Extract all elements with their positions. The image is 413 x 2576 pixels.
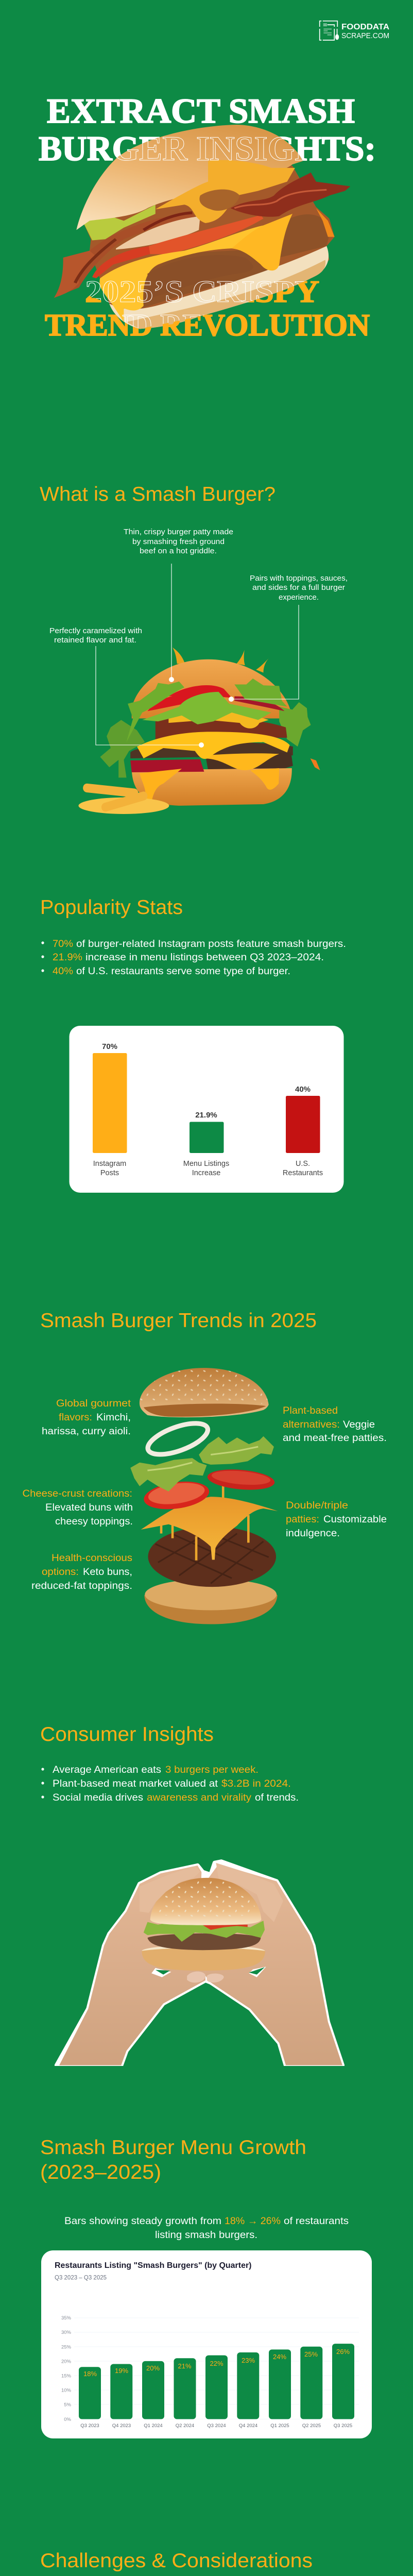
list: consumer insights: awareness and virality — [147, 1792, 252, 1803]
title: orange lines: 2025’S CRISPY — [85, 275, 319, 309]
chart gridlines and y axis: 35% — [61, 2315, 72, 2321]
callout: toppings: Pairs with toppings, sauces, — [250, 574, 348, 583]
chart gridlines and y axis: 15% — [61, 2373, 72, 2379]
heading: consumer insights: Consumer Insights — [40, 1723, 214, 1745]
list: popularity stats: 70% — [53, 939, 73, 950]
title: orange lines: TREND REVOLUTION — [45, 308, 370, 342]
trend: cheese-crust creations: Elevated buns with — [45, 1502, 133, 1513]
chart quarter labels: Q2 2024 — [176, 2423, 194, 2429]
chart quarter labels: Q3 2025 — [334, 2423, 352, 2429]
chart value labels: 19% — [115, 2367, 128, 2375]
text: growth description — [64, 2216, 349, 2241]
trend: cheese-crust creations: Cheese-crust creations: — [23, 1488, 132, 1499]
trend: plant-based alternatives: and meat-free patties. — [283, 1433, 387, 1444]
callout: caramelized — [49, 626, 204, 748]
chart value labels: 21% — [178, 2362, 192, 2370]
list: popularity stats: of burger-related Instagram posts feature smash burgers. — [76, 939, 346, 950]
chart quarter labels — [80, 2423, 352, 2429]
callout: toppings: experience. — [279, 593, 319, 602]
logo: header — [320, 21, 389, 40]
exploded burger illustration — [130, 1368, 278, 1624]
bar: us restaurants: Restaurants — [283, 1169, 323, 1177]
list: consumer insights: $3.2B in 2024. — [221, 1778, 291, 1789]
trend: health-conscious options: Health-conscious — [51, 1553, 132, 1564]
list: popularity stats: increase in menu listings between Q3 2023–2024. — [85, 952, 324, 963]
chart gridlines and y axis — [61, 2315, 359, 2422]
chart gridlines and y axis: 25% — [61, 2344, 72, 2350]
trend: double triple patties: indulgence. — [286, 1528, 340, 1539]
bar: instagram posts: 70% — [102, 1042, 117, 1051]
list: consumer insights: of trends. — [255, 1792, 299, 1803]
chart gridlines and y axis: 20% — [61, 2359, 72, 2365]
callout: patty — [124, 528, 233, 682]
trend: health-conscious options — [31, 1553, 132, 1591]
title: orange lines — [44, 281, 370, 336]
chart quarter labels: Q4 2023 — [112, 2423, 131, 2429]
title: first two lines: BURGER INSIGHTS: — [39, 129, 376, 168]
text: growth description: of restaurants — [284, 2216, 349, 2227]
callout: patty: beef on a hot griddle. — [140, 547, 217, 555]
chart value labels: 18% — [83, 2370, 97, 2378]
bar: menu listings increase — [183, 1111, 229, 1177]
chart gridlines and y axis: 0% — [64, 2417, 72, 2422]
bar: menu listings increase: Menu Listings — [183, 1160, 229, 1168]
list: popularity stats: 40% — [53, 966, 73, 977]
list: consumer insights — [41, 1765, 299, 1803]
chart quarter labels: Q1 2024 — [144, 2423, 163, 2429]
chart subtitle: Q3 2023 – Q3 2025 — [55, 2274, 107, 2281]
trend: global gourmet flavors: Global gourmet — [56, 1398, 131, 1409]
heading: what is a smash burger: What is a Smash Burger? — [40, 483, 276, 505]
text: growth description: listing smash burgers. — [155, 2230, 257, 2241]
list: popularity stats — [41, 939, 346, 977]
chart quarter labels: Q3 2024 — [207, 2423, 226, 2429]
trend: plant-based alternatives: Veggie — [343, 1419, 375, 1430]
chart gridlines and y axis: 30% — [61, 2330, 72, 2335]
title: first two lines: EXTRACT SMASH — [47, 91, 355, 130]
trend: plant-based alternatives: Plant-based — [283, 1405, 338, 1416]
chart value labels: 25% — [304, 2350, 318, 2358]
bar: menu listings increase: 21.9% — [195, 1111, 217, 1120]
trend: plant-based alternatives: alternatives: — [283, 1419, 340, 1430]
bar: us restaurants: U.S. — [296, 1160, 310, 1168]
chart quarter labels: Q2 2025 — [302, 2423, 321, 2429]
callout: patty: by smashing fresh ground — [132, 537, 225, 546]
chart title: Restaurants Listing "Smash Burgers" (by Quarter) — [55, 2261, 251, 2270]
chart gridlines and y axis: 10% — [61, 2387, 72, 2394]
callout: caramelized: retained flavor and fat. — [54, 636, 136, 645]
bar: instagram posts: Posts — [100, 1169, 119, 1177]
trend: double triple patties: patties: — [286, 1514, 319, 1525]
text: growth description: Bars showing steady growth from — [64, 2216, 221, 2227]
callout: toppings: and sides for a full burger — [252, 583, 345, 592]
callout: toppings — [229, 574, 348, 702]
list: popularity stats: 21.9% — [53, 952, 82, 963]
callout: patty: Thin, crispy burger patty made — [124, 528, 233, 536]
image: hands holding a burger — [57, 1861, 342, 2065]
list: consumer insights: Plant-based meat market valued at — [53, 1778, 218, 1789]
logo: header: FOODDATA — [341, 23, 389, 31]
title: outlined part over bun: TREND REVOLUTION — [45, 308, 370, 342]
title: outlined part over bun: 2025’S CRISPY — [85, 275, 319, 309]
hero burger illustration — [54, 125, 350, 329]
heading: menu growth — [40, 2137, 306, 2183]
heading: challenges: Challenges & Considerations — [40, 2550, 313, 2572]
chart value labels — [83, 2348, 350, 2378]
chart gridlines and y axis: 5% — [64, 2402, 72, 2408]
trend: health-conscious options: reduced-fat toppings. — [31, 1581, 132, 1591]
burger illustration: anatomy — [78, 648, 320, 814]
chart quarter labels: Q3 2023 — [80, 2423, 99, 2429]
trend: global gourmet flavors: Kimchi, — [96, 1412, 131, 1423]
bar: menu listings increase: Increase — [192, 1169, 220, 1177]
title: first two lines — [39, 99, 373, 161]
heading: popularity stats: Popularity Stats — [40, 896, 183, 919]
chart quarter labels: Q4 2024 — [239, 2423, 257, 2429]
title — [39, 91, 376, 342]
list: popularity stats: of U.S. restaurants serve some type of burger. — [76, 966, 290, 977]
chart value labels: 26% — [336, 2348, 350, 2355]
title: outlined part over bun: BURGER INSIGHTS: — [39, 129, 376, 168]
trend: health-conscious options: Keto buns, — [83, 1567, 132, 1578]
bar: instagram posts: Instagram — [93, 1160, 126, 1168]
chart value labels: 22% — [210, 2360, 223, 2367]
chart value labels: 20% — [146, 2364, 160, 2372]
heading: menu growth: (2023–2025) — [40, 2161, 161, 2183]
trend: global gourmet flavors: harissa, curry aioli. — [42, 1426, 131, 1437]
panel: popularity bar chart — [69, 1026, 344, 1193]
list: consumer insights: 3 burgers per week. — [165, 1765, 259, 1775]
text: growth description: 18% → 26% — [225, 2216, 281, 2227]
trend: cheese-crust creations — [23, 1488, 133, 1527]
panel: quarterly bar chart — [41, 2250, 372, 2438]
chart bars — [79, 2344, 354, 2419]
list: consumer insights: Average American eats — [53, 1765, 161, 1775]
heading: trends: Smash Burger Trends in 2025 — [40, 1310, 317, 1332]
heading: menu growth: Smash Burger Menu Growth — [40, 2137, 306, 2159]
chart quarter labels: Q1 2025 — [270, 2423, 289, 2429]
list: consumer insights: Social media drives — [53, 1792, 143, 1803]
trend: double triple patties: Double/triple — [286, 1500, 348, 1511]
chart value labels: 23% — [242, 2357, 255, 2364]
trend: global gourmet flavors: flavors: — [59, 1412, 92, 1423]
chart value labels: 24% — [273, 2353, 286, 2361]
trend: double triple patties — [286, 1500, 387, 1539]
bar: instagram posts — [93, 1042, 127, 1177]
trend: global gourmet flavors — [42, 1398, 131, 1437]
trend: double triple patties: Customizable — [323, 1514, 387, 1525]
trend: cheese-crust creations: cheesy toppings. — [55, 1516, 133, 1527]
trend: plant-based alternatives — [283, 1405, 387, 1444]
callout: caramelized: Perfectly caramelized with — [49, 626, 142, 635]
title: outlined part over bun — [87, 137, 305, 329]
logo: header: SCRAPE.COM — [341, 31, 389, 40]
bar: us restaurants: 40% — [295, 1085, 311, 1094]
bar: us restaurants — [283, 1085, 323, 1177]
trend: health-conscious options: options: — [42, 1567, 79, 1578]
